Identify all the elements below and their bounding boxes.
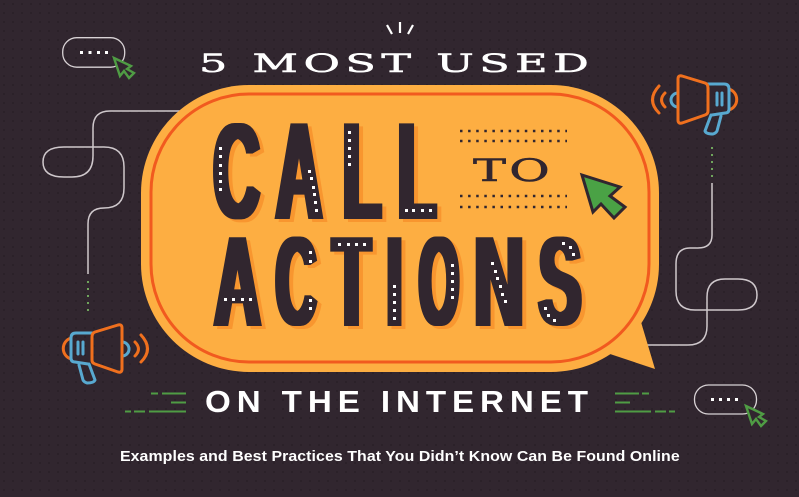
word: ACTIONS xyxy=(214,209,581,355)
word: CALL xyxy=(213,93,436,249)
chat box top left xyxy=(63,38,125,67)
icon: cursor top left xyxy=(114,58,134,78)
word: ACTIONS: I xyxy=(387,210,402,355)
speech bubble xyxy=(141,85,659,372)
word: ACTIONS: N xyxy=(474,209,524,353)
word: ACTIONS: A xyxy=(214,209,261,354)
heading: on the internet: ON THE INTERNET xyxy=(205,384,588,419)
word: CALL: A xyxy=(276,93,322,249)
icon: main cursor xyxy=(582,175,625,218)
word: TO: TO xyxy=(473,153,550,188)
icon: megaphone bottom left xyxy=(63,325,148,383)
word: ACTIONS: C xyxy=(276,211,316,352)
word: CALL: L xyxy=(398,93,436,249)
connector line: left xyxy=(43,111,200,274)
chat box bottom right xyxy=(694,385,756,414)
green speed lines right xyxy=(615,394,675,412)
green dotted line left xyxy=(87,281,89,311)
word: CALL: L xyxy=(343,93,381,249)
green speed lines left xyxy=(125,394,186,412)
dotted rules above TO xyxy=(460,131,567,141)
spark lines xyxy=(387,22,413,34)
connector line: right xyxy=(640,183,757,345)
title: 5 most used: 5 MOST USED xyxy=(199,49,589,78)
word: CALL: C xyxy=(213,95,260,247)
subtitle: Examples and Best Practices That You Didn’t Know Can Be Found Online xyxy=(120,448,680,465)
green dotted line right xyxy=(711,147,713,177)
icon: cursor bottom right xyxy=(746,406,766,426)
icon: megaphone top right xyxy=(652,76,737,134)
dotted rules below TO xyxy=(460,196,567,207)
word: ACTIONS: T xyxy=(333,210,370,354)
word: ACTIONS: S xyxy=(539,213,581,353)
word: ACTIONS: O xyxy=(419,212,459,353)
